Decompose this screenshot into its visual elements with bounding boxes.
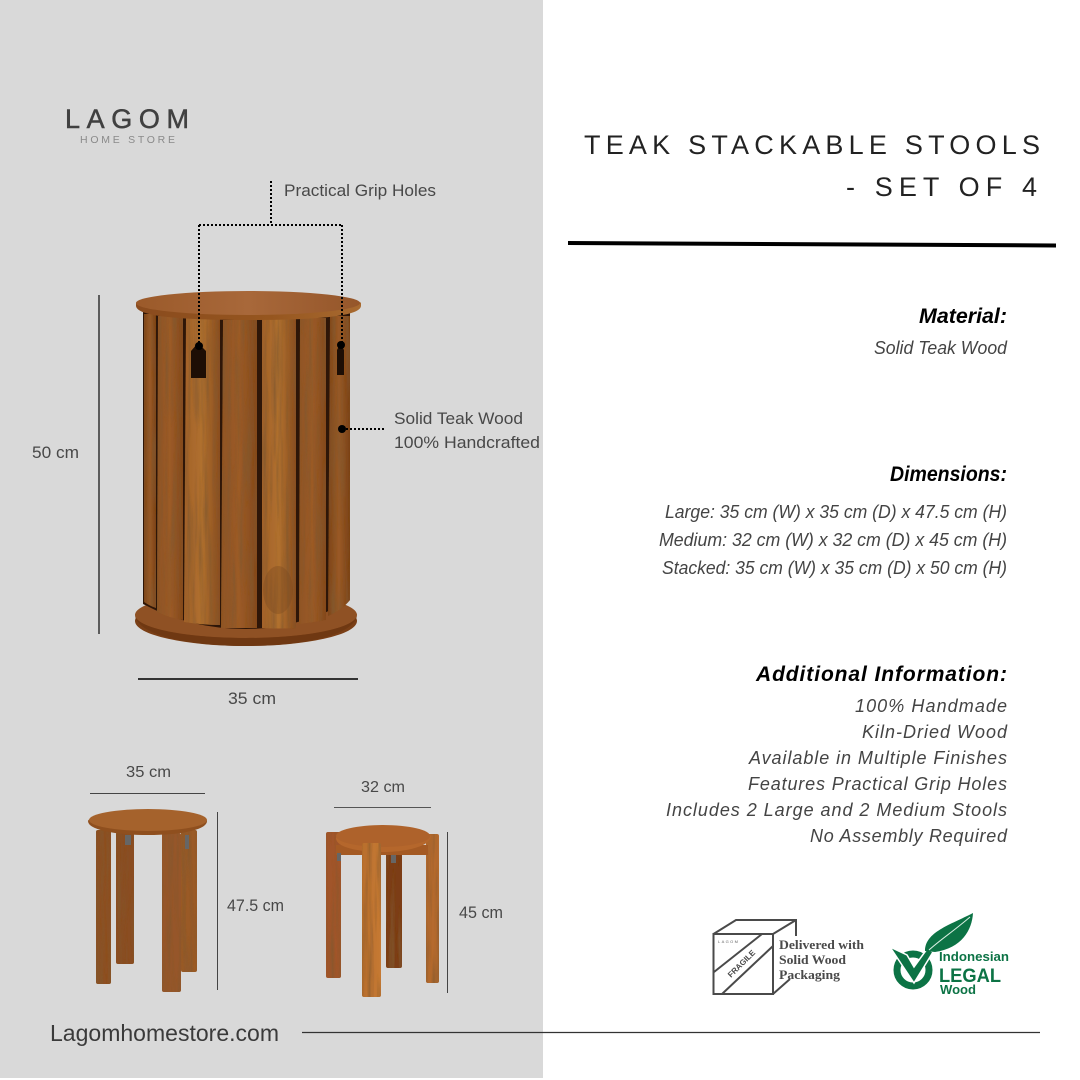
product photo: stacked stools xyxy=(135,291,361,646)
text block: additional information: Features Practical Grip Holes xyxy=(748,774,1007,794)
logo: Lagom Home Store: LAGOM xyxy=(65,104,189,134)
text block: additional information: 100% Handmade xyxy=(855,696,1007,716)
icon: fragile packaging box: FRAGILE xyxy=(726,948,758,979)
grip holes xyxy=(191,343,344,378)
icon: Indonesian Legal Wood badge: LEGAL xyxy=(939,965,1001,987)
dimension: large stool: 35 cm xyxy=(126,764,171,781)
text: packaging note: Solid Wood xyxy=(779,952,847,967)
text block: dimensions xyxy=(659,463,1007,578)
text block: additional information: Kiln-Dried Wood xyxy=(862,722,1008,742)
callout: practical grip holes xyxy=(195,181,436,350)
text: packaging note: Delivered with xyxy=(779,937,865,952)
title: - SET OF 4 xyxy=(846,172,1037,202)
base plate xyxy=(135,592,357,646)
product photo: large stool xyxy=(88,809,207,992)
slatted body xyxy=(143,312,350,629)
icon: Indonesian Legal Wood badge xyxy=(890,913,1009,997)
dimension: large stool: 47.5 cm xyxy=(227,897,284,915)
title: TEAK STACKABLE STOOLS xyxy=(584,130,1040,160)
dimension: medium stool: 45 cm xyxy=(459,904,503,922)
text block: material: Solid Teak Wood xyxy=(874,338,1008,358)
dimension: large stool xyxy=(90,764,284,990)
text block: material: Material: xyxy=(919,305,1007,328)
heading rule xyxy=(568,241,1056,248)
text: packaging note xyxy=(779,937,865,982)
text block: additional information: Available in Multiple Finishes xyxy=(748,748,1007,768)
dimension: stack width 35 cm: 35 cm xyxy=(228,689,276,708)
panel: grey product background xyxy=(0,0,543,1078)
title xyxy=(584,130,1040,202)
footer rule xyxy=(302,1032,1040,1034)
callout: solid teak wood: 100% Handcrafted xyxy=(394,433,540,452)
icon: fragile packaging box: LAGOM xyxy=(718,939,738,944)
text block: dimensions: Large: 35 cm (W) x 35 cm (D) x 47.5 cm (H) xyxy=(665,502,1007,522)
dimension: stack height 50 cm: 50 cm xyxy=(32,443,79,462)
icon: fragile packaging box xyxy=(714,920,796,994)
logo: Lagom Home Store: HOME STORE xyxy=(80,134,175,146)
text block: additional information: No Assembly Required xyxy=(810,826,1008,846)
text block: material xyxy=(874,305,1008,358)
icon: Indonesian Legal Wood badge: Wood xyxy=(940,983,976,997)
icon: Indonesian Legal Wood badge: Indonesian xyxy=(939,949,1009,964)
text block: additional information xyxy=(666,663,1008,846)
text block: additional information: Additional Information: xyxy=(755,663,1007,686)
website footer: Lagomhomestore.com xyxy=(50,1020,279,1046)
dimension: medium stool xyxy=(334,779,503,993)
callout: practical grip holes: Practical Grip Holes xyxy=(284,181,436,200)
callout: solid teak wood: Solid Teak Wood xyxy=(394,409,523,428)
text block: dimensions: Dimensions: xyxy=(890,463,1007,486)
round top xyxy=(136,291,361,320)
text block: additional information: Includes 2 Large and 2 Medium Stools xyxy=(666,800,1007,820)
product photo: medium stool xyxy=(326,825,439,997)
text block: dimensions: Medium: 32 cm (W) x 32 cm (D) x 45 cm (H) xyxy=(659,530,1007,550)
text: packaging note: Packaging xyxy=(779,967,841,982)
dimension: medium stool: 32 cm xyxy=(361,779,405,796)
text block: dimensions: Stacked: 35 cm (W) x 35 cm (D) x 50 cm (H) xyxy=(662,558,1007,578)
callout: solid teak wood xyxy=(338,409,540,452)
